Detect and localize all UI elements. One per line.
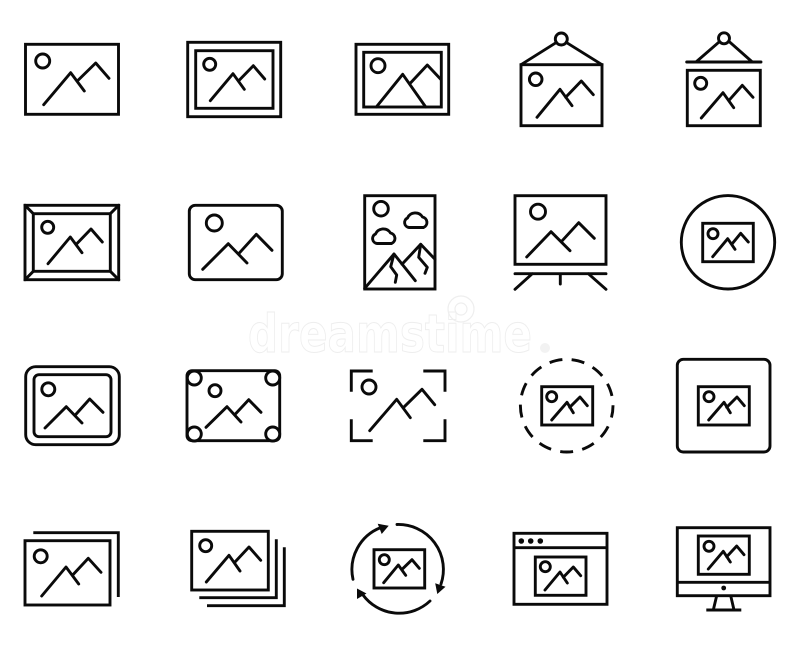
icon: picture in browser window — [514, 533, 607, 604]
icon: picture on easel — [515, 196, 606, 289]
icon: picture on desktop monitor — [677, 528, 770, 610]
icon: picture in rounded double frame — [26, 367, 119, 445]
icon: hanging picture — [521, 33, 602, 126]
icon: hanging picture with rail — [687, 33, 761, 126]
icon: picture with focus corners — [351, 371, 445, 441]
icon: framed picture with solid mountains — [356, 44, 449, 114]
icon: portrait landscape with clouds — [365, 196, 435, 289]
icon: three stacked pictures — [192, 531, 284, 606]
icon: picture with refresh arrows — [352, 524, 446, 613]
icon: two stacked pictures — [25, 533, 118, 605]
icon: picture in bevelled frame — [25, 205, 119, 280]
icon: rounded picture — [189, 205, 282, 280]
icon: picture in rounded square — [677, 359, 770, 452]
icon: picture in double frame — [188, 42, 281, 117]
icon: picture in circle — [681, 196, 775, 289]
watermark: dreamstime — [248, 304, 532, 365]
icon: plain picture — [26, 44, 118, 114]
icon: picture with corner rivets — [187, 371, 280, 441]
icon: picture in dashed circle — [520, 359, 613, 452]
